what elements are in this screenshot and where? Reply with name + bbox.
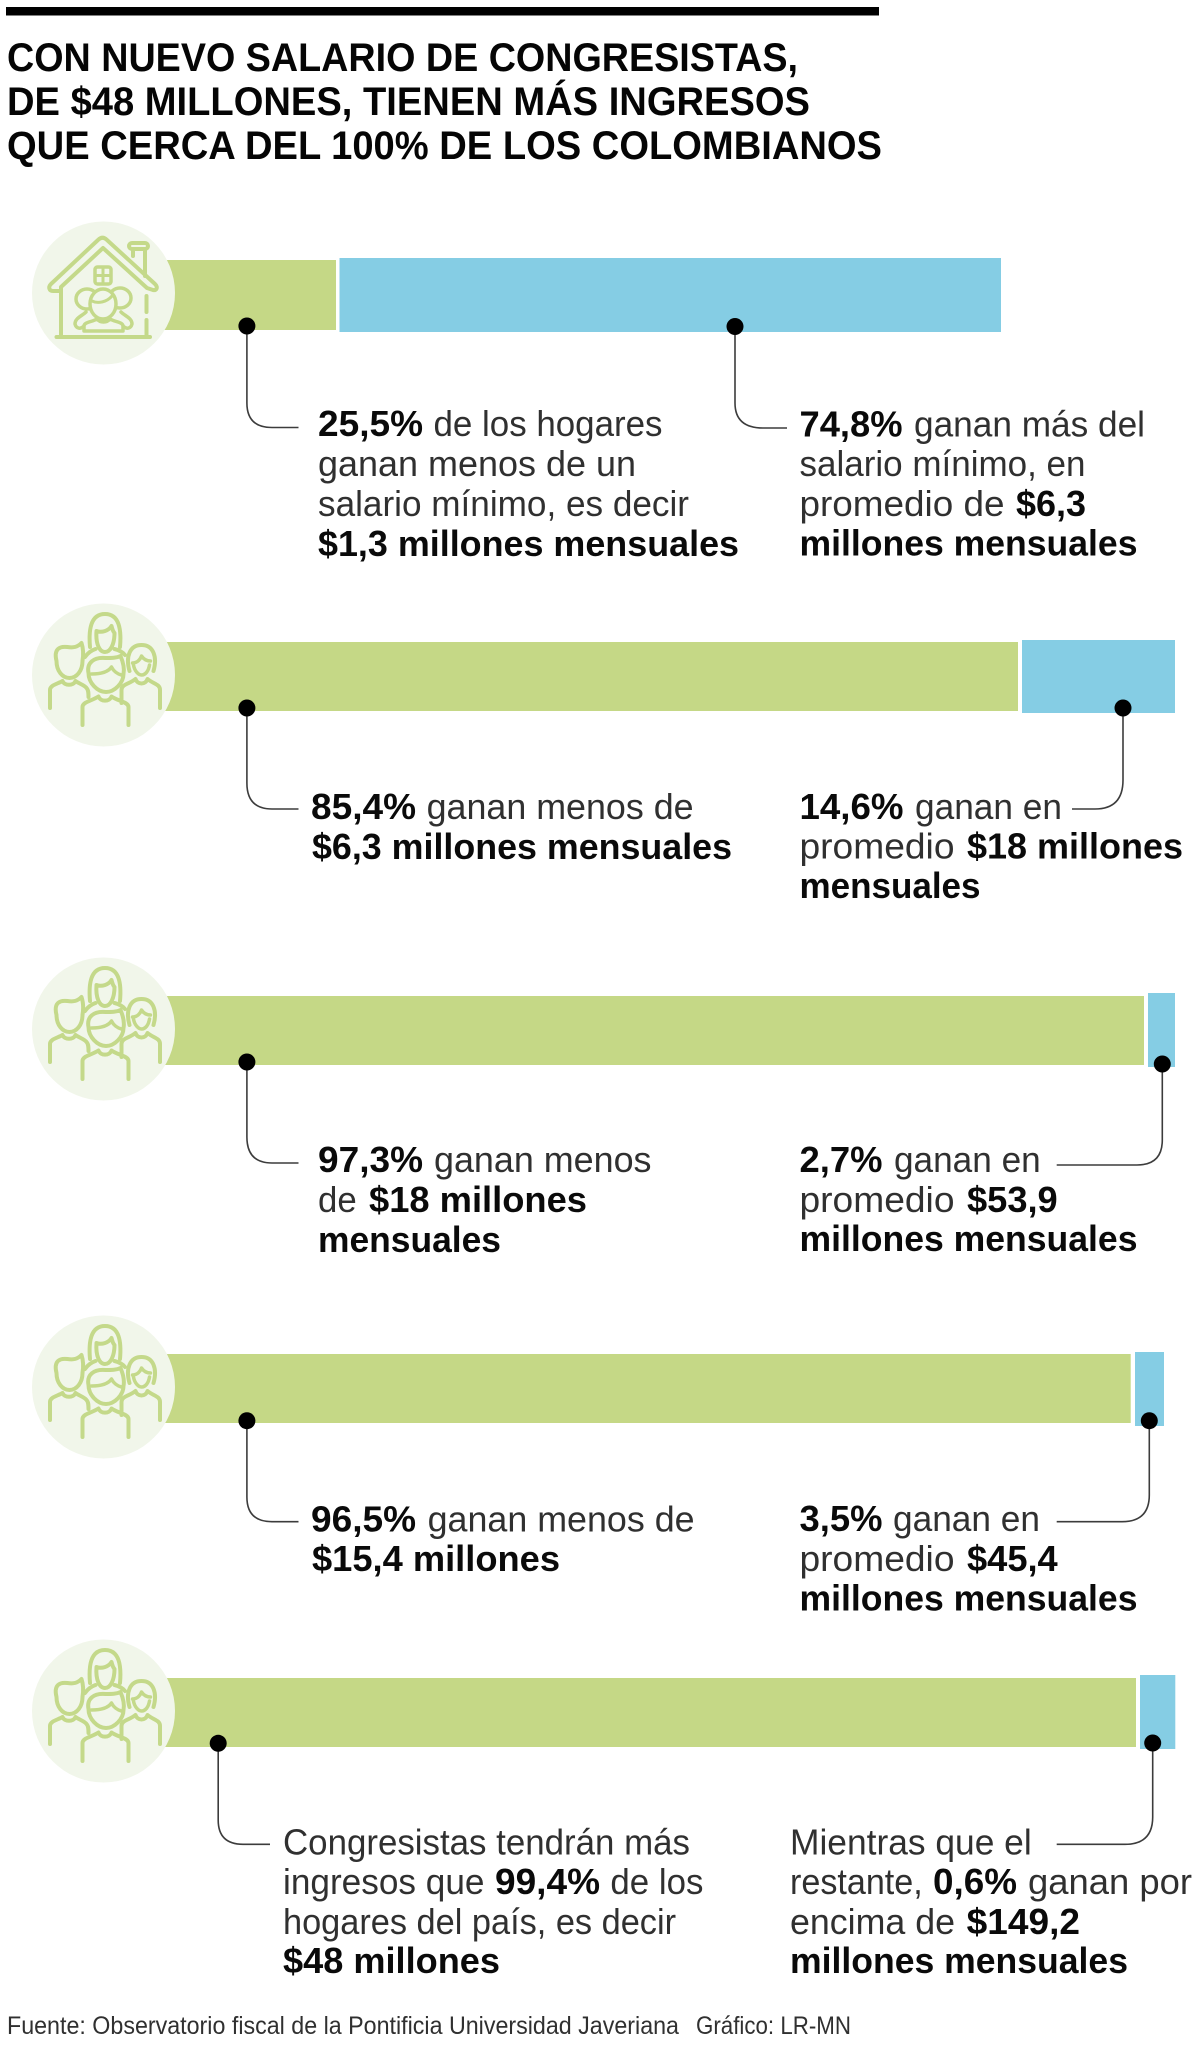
text: 3,5% ganan en promedio: ganan en	[893, 1498, 1040, 1539]
text: 25,5% de los hogares: $1,3 millones mensuales	[318, 523, 739, 564]
text: mientras que el restante: $149,2	[967, 1901, 1080, 1942]
title	[7, 36, 882, 168]
icon: people group	[32, 1316, 175, 1458]
text: 74,8% ganan más del salario mínimo: millones mensuales	[800, 522, 1138, 564]
bar segment: 99,4% green	[165, 1678, 1136, 1747]
text: 25,5% de los hogares: salario mínimo, es decir	[318, 483, 689, 524]
marker dot	[238, 1412, 255, 1429]
connector: 97,3%	[247, 1062, 298, 1163]
connector: 74,8%	[735, 326, 787, 428]
icon: house with family	[32, 222, 175, 364]
icon: people group	[32, 1640, 175, 1782]
panel: row 4	[32, 1316, 1164, 1619]
text: 97,3% ganan menos: ganan menos	[434, 1139, 652, 1180]
bar segment: 97,3% green	[165, 996, 1144, 1065]
text: 3,5% ganan en promedio: promedio	[800, 1538, 954, 1579]
text: 85,4% ganan menos: ganan menos de	[427, 786, 694, 827]
connector: 96,5%	[247, 1421, 298, 1522]
text: 97,3% ganan menos: de	[318, 1179, 357, 1220]
text: mientras que el restante: ganan por	[1028, 1861, 1192, 1902]
marker dot	[238, 700, 255, 716]
text: 25,5% de los hogares: de los hogares	[434, 403, 662, 444]
text: mientras que el restante: millones mensuales	[790, 1940, 1128, 1981]
marker dot	[1154, 1056, 1171, 1072]
text: 25,5% de los hogares: 25,5%	[318, 403, 423, 444]
text: 96,5% ganan menos: 96,5%	[311, 1498, 416, 1540]
text: 25,5% de los hogares	[318, 403, 739, 564]
text: 74,8% ganan más del salario mínimo: $6,3	[1016, 483, 1086, 524]
bar segment: 96,5% green	[165, 1354, 1131, 1423]
text: 14,6% ganan en promedio	[800, 786, 1183, 906]
marker dot	[1144, 1734, 1161, 1752]
marker dot	[238, 318, 255, 334]
text: 85,4% ganan menos	[311, 786, 732, 867]
panel: row 2	[32, 604, 1183, 906]
text: congresistas tendrán más ingresos: $48 millones	[283, 1940, 500, 1981]
text: 14,6% ganan en promedio: promedio	[800, 826, 954, 866]
panel: row 1 hogares salario mínimo	[32, 222, 1145, 564]
text: congresistas tendrán más ingresos: hogares del país, es decir	[283, 1901, 676, 1942]
bar segment: 74,8% blue	[340, 258, 1001, 332]
icon: people group	[32, 604, 175, 746]
text: 85,4% ganan menos: $6,3 millones mensuales	[312, 826, 732, 867]
text: congresistas tendrán más ingresos	[283, 1821, 703, 1981]
text: mientras que el restante: restante,	[790, 1861, 923, 1902]
text: 3,5% ganan en promedio: millones mensuales	[800, 1578, 1138, 1619]
connector: 14,6%	[1072, 708, 1123, 809]
text: 74,8% ganan más del salario mínimo: promedio de	[800, 483, 1004, 524]
bar segment: 14,6% blue	[1022, 640, 1175, 713]
connector: 85,4%	[247, 708, 298, 809]
text: 14,6% ganan en promedio: ganan en	[915, 786, 1062, 827]
marker dot	[210, 1735, 227, 1752]
text: 3,5% ganan en promedio	[800, 1498, 1138, 1619]
text: 96,5% ganan menos: ganan menos de	[428, 1498, 695, 1540]
connector: 25,5%	[247, 326, 298, 428]
text: 2,7% ganan en promedio: $53,9	[967, 1179, 1058, 1220]
panel: row 3	[32, 958, 1175, 1260]
marker dot	[726, 318, 744, 335]
connector: 2,7%	[1057, 1064, 1162, 1165]
text: mientras que el restante: Mientras que el	[790, 1821, 1032, 1862]
text: 85,4% ganan menos: 85,4%	[311, 786, 416, 827]
text: 2,7% ganan en promedio: 2,7%	[800, 1139, 882, 1180]
panel: row 5 congresistas	[32, 1640, 1192, 1981]
text: 14,6% ganan en promedio: 14,6%	[800, 786, 904, 827]
bar segment: 3,5% blue	[1135, 1352, 1164, 1426]
marker dot	[1141, 1412, 1158, 1429]
bar segment: 85,4% green	[165, 642, 1018, 711]
connector: 99,4%	[218, 1743, 270, 1844]
source footer: Gráfico: LR-MN	[696, 2012, 851, 2040]
text: 2,7% ganan en promedio	[800, 1139, 1138, 1259]
text: 97,3% ganan menos: $18 millones	[369, 1179, 587, 1220]
text: 14,6% ganan en promedio: mensuales	[800, 865, 980, 906]
text: mientras que el restante: 0,6%	[933, 1861, 1017, 1902]
text: 96,5% ganan menos: $15,4 millones	[312, 1538, 560, 1579]
text: 97,3% ganan menos: mensuales	[318, 1219, 501, 1260]
text: 74,8% ganan más del salario mínimo: salario mínimo, en	[800, 443, 1086, 484]
text: congresistas tendrán más ingresos: ingresos que	[283, 1861, 484, 1902]
bar segment: 2,7% blue	[1148, 993, 1175, 1067]
text: 74,8% ganan más del salario mínimo: 74,8%	[800, 404, 902, 444]
text: congresistas tendrán más ingresos: 99,4%	[495, 1861, 600, 1902]
title: QUE CERCA DEL 100% DE LOS COLOMBIANOS	[7, 124, 882, 168]
title: DE $48 MILLONES, TIENEN MÁS INGRESOS	[7, 79, 810, 124]
text: 97,3% ganan menos: 97,3%	[318, 1139, 423, 1180]
text: 3,5% ganan en promedio: $45,4	[967, 1538, 1058, 1579]
marker dot	[238, 1054, 255, 1070]
source footer: Fuente: Observatorio fiscal de la Pontificia Universidad Javeriana	[7, 2012, 679, 2040]
text: 74,8% ganan más del salario mínimo	[800, 404, 1145, 564]
text: 2,7% ganan en promedio: millones mensuales	[800, 1218, 1138, 1259]
text: 3,5% ganan en promedio: 3,5%	[800, 1498, 882, 1539]
connector: 0,6%	[1057, 1743, 1153, 1844]
bar segment: 0,6% blue	[1140, 1675, 1175, 1749]
text: congresistas tendrán más ingresos: Congresistas tendrán más	[283, 1821, 690, 1862]
text: mientras que el restante: encima de	[790, 1901, 955, 1942]
text: 97,3% ganan menos	[318, 1139, 652, 1260]
text: 2,7% ganan en promedio: ganan en	[894, 1139, 1041, 1180]
text: 25,5% de los hogares: ganan menos de un	[318, 443, 636, 484]
marker dot	[1114, 700, 1132, 716]
top rule	[6, 7, 879, 16]
text: 2,7% ganan en promedio: promedio	[800, 1179, 954, 1220]
text: 74,8% ganan más del salario mínimo: ganan más del	[914, 404, 1145, 444]
icon: people group	[32, 958, 175, 1100]
bar segment: 25,5% green	[160, 260, 336, 330]
connector: 3,5%	[1057, 1421, 1149, 1522]
text: 14,6% ganan en promedio: $18 millones	[967, 826, 1183, 866]
title: CON NUEVO SALARIO DE CONGRESISTAS,	[7, 36, 798, 80]
text: congresistas tendrán más ingresos: de los	[610, 1861, 703, 1902]
text: 96,5% ganan menos	[311, 1498, 695, 1579]
text: mientras que el restante	[790, 1821, 1192, 1981]
